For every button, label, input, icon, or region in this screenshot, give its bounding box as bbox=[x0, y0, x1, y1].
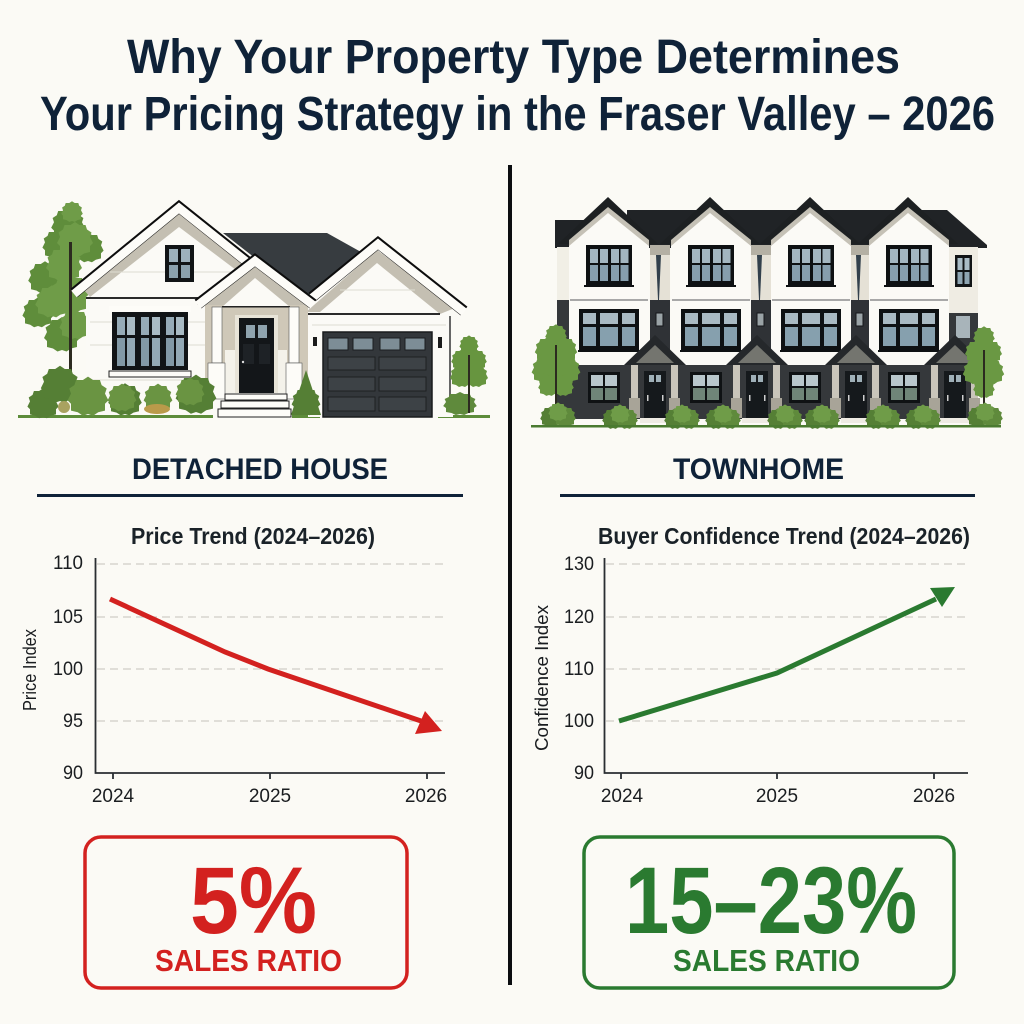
y axis title: Price Index bbox=[20, 629, 40, 711]
ground strips bbox=[18, 415, 490, 418]
porch fascia bbox=[198, 260, 313, 304]
green trend line bbox=[619, 599, 936, 721]
upper window bbox=[165, 245, 194, 282]
y axis labels: 95 bbox=[63, 711, 83, 732]
illustration: townhome bbox=[531, 197, 1004, 429]
red trend line bbox=[110, 599, 424, 722]
shrubs bbox=[540, 402, 1003, 429]
x axis labels: 2024 bbox=[601, 786, 644, 807]
y axis labels: 110 bbox=[564, 659, 594, 680]
y axis labels bbox=[53, 553, 83, 784]
x axis labels: 2026 bbox=[913, 786, 955, 807]
chart: buyer confidence trend bbox=[532, 523, 970, 807]
x axis labels: 2025 bbox=[249, 786, 291, 807]
y axis labels bbox=[564, 554, 594, 784]
left tree bbox=[532, 324, 580, 423]
gap strips bbox=[650, 245, 870, 365]
hip roof bbox=[223, 233, 361, 297]
x axis labels: 2026 bbox=[405, 786, 447, 807]
tree left bbox=[22, 201, 104, 392]
heading: townhome: TOWNHOME bbox=[673, 453, 844, 486]
value: 5%: 5% bbox=[190, 848, 317, 954]
left end wall bbox=[557, 247, 569, 365]
center divider bbox=[508, 165, 512, 985]
callout: detached sales ratio bbox=[85, 837, 407, 988]
y axis title: Confidence Index bbox=[532, 605, 552, 751]
x axis labels: 2025 bbox=[756, 786, 798, 807]
label: SALES RATIO bbox=[673, 943, 860, 978]
x axis labels bbox=[601, 786, 955, 807]
main gable wall bbox=[84, 212, 248, 393]
red arrowhead bbox=[415, 711, 442, 734]
chart title: Price Trend (2024–2026) bbox=[131, 523, 375, 549]
y axis labels: 110 bbox=[53, 553, 83, 574]
ground floor windows bbox=[588, 372, 920, 403]
unit 2 bbox=[660, 197, 760, 365]
title: Why Your Property Type Determines bbox=[127, 31, 900, 84]
rule right bbox=[560, 494, 975, 497]
y axis labels: 105 bbox=[53, 607, 83, 628]
label: SALES RATIO bbox=[155, 943, 342, 978]
unit 1 bbox=[558, 197, 658, 365]
porches and doors bbox=[624, 335, 986, 423]
unit 4 bbox=[858, 197, 958, 365]
main gable fascia bbox=[74, 207, 248, 293]
y axis labels: 100 bbox=[53, 659, 83, 680]
illustration: detached house bbox=[18, 201, 490, 418]
x axis labels: 2024 bbox=[92, 786, 135, 807]
rule left bbox=[37, 494, 463, 497]
garage door bbox=[313, 332, 442, 417]
axes bbox=[604, 558, 968, 779]
axes bbox=[96, 558, 445, 779]
y axis labels: 90 bbox=[574, 763, 594, 784]
y axis labels: 120 bbox=[564, 607, 594, 628]
value: 15-23%: 15–23% bbox=[625, 848, 917, 954]
tree right bbox=[450, 335, 488, 413]
chart: price trend bbox=[20, 523, 447, 807]
title bbox=[40, 31, 995, 141]
callout: townhome sales ratio bbox=[584, 837, 954, 988]
unit 3 bbox=[760, 197, 860, 365]
right end wall bbox=[949, 247, 978, 365]
y axis labels: 130 bbox=[564, 554, 594, 575]
front steps bbox=[218, 394, 291, 417]
back roof bbox=[555, 210, 987, 248]
garage wing bbox=[306, 250, 455, 417]
y axis labels: 100 bbox=[564, 711, 594, 732]
x axis labels bbox=[92, 786, 447, 807]
garage fascia bbox=[312, 243, 464, 311]
large window bbox=[109, 306, 191, 377]
chart title: Buyer Confidence Trend (2024–2026) bbox=[598, 523, 970, 549]
porch bbox=[197, 262, 313, 399]
shrubs bbox=[27, 366, 477, 418]
y axis labels: 90 bbox=[63, 763, 83, 784]
right tree bbox=[963, 326, 1004, 423]
ground line bbox=[531, 425, 1001, 428]
front door bbox=[239, 318, 274, 393]
green arrowhead bbox=[930, 587, 955, 607]
heading: detached house: DETACHED HOUSE bbox=[132, 453, 388, 486]
ground floor band bbox=[557, 365, 978, 419]
